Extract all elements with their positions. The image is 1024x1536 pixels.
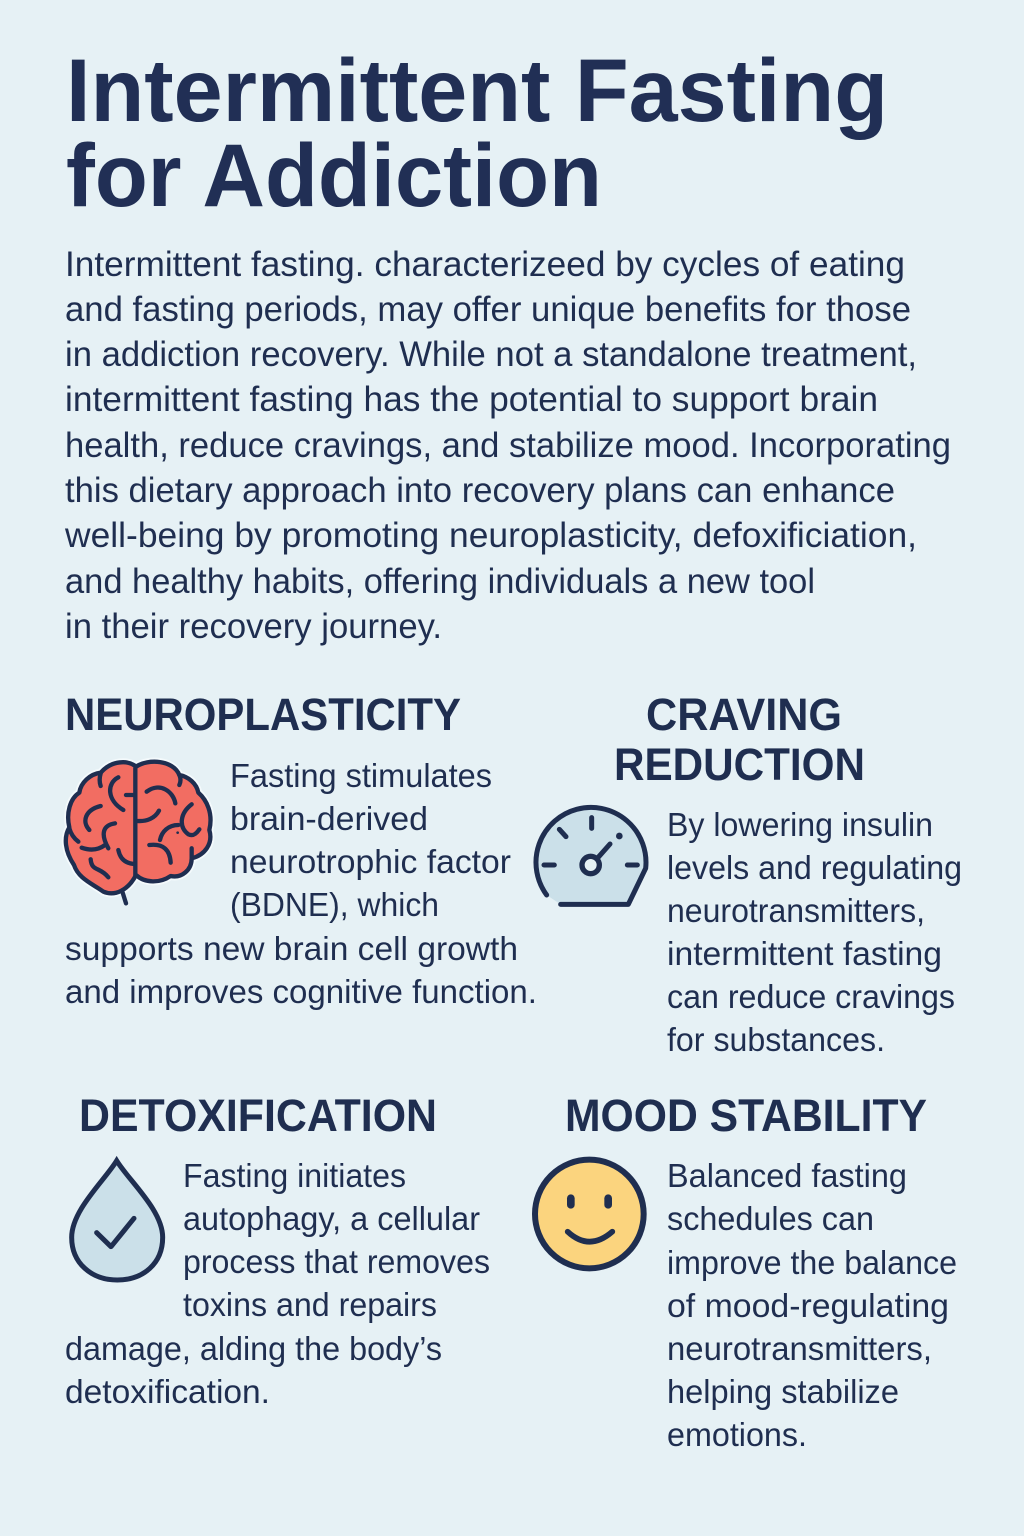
- body text: and improves cognitive function.: [65, 973, 537, 1010]
- heading: detoxification: DETOXIFICATION: [79, 1090, 437, 1141]
- body text: helping stabilize: [667, 1373, 899, 1410]
- body text: can reduce cravings: [667, 978, 955, 1015]
- body text: detoxification.: [65, 1373, 270, 1410]
- intro paragraph: and healthy habits, offering individuals a new tool: [65, 562, 815, 601]
- intro paragraph: this dietary approach into recovery plans can enhance: [65, 471, 895, 510]
- body text: levels and regulating: [667, 849, 962, 886]
- panel: neuroplasticity: [65, 689, 537, 1010]
- body text: toxins and repairs: [183, 1286, 437, 1323]
- heading: mood stability: MOOD STABILITY: [565, 1090, 927, 1141]
- heading: neuroplasticity: NEUROPLASTICITY: [65, 689, 461, 740]
- body text: for substances.: [667, 1021, 885, 1058]
- body text: neurotransmitters,: [667, 892, 925, 929]
- panel: craving reduction: [536, 689, 962, 1058]
- body text: [65, 757, 537, 1010]
- title: for Addiction: [66, 125, 602, 225]
- title: [66, 40, 888, 225]
- body text: (BDNE), which: [230, 886, 439, 923]
- intro paragraph: health, reduce cravings, and stabilize mood. Incorporating: [65, 426, 951, 465]
- body text: neurotrophic factor: [230, 843, 511, 880]
- body text: of mood-regulating: [667, 1287, 949, 1324]
- panel: mood stability: [535, 1090, 957, 1453]
- body text: neurotransmitters,: [667, 1330, 932, 1367]
- body text: schedules can: [667, 1200, 874, 1237]
- intro paragraph: and fasting periods, may offer unique benefits for those: [65, 290, 911, 329]
- intro paragraph: [64, 245, 951, 646]
- body text: [65, 1157, 490, 1410]
- body text: process that removes: [183, 1243, 490, 1280]
- body text: By lowering insulin: [667, 806, 933, 843]
- body text: [667, 1157, 957, 1453]
- intro paragraph: in their recovery journey.: [65, 607, 442, 646]
- icon: brain: [66, 762, 211, 903]
- heading: craving reduction: REDUCTION: [614, 739, 865, 790]
- body text: intermittent fasting: [667, 935, 942, 972]
- panel: detoxification: [65, 1090, 490, 1410]
- body text: Balanced fasting: [667, 1157, 907, 1194]
- body text: damage, alding the body’s: [65, 1330, 442, 1367]
- icon: water drop with check: [72, 1161, 163, 1280]
- intro paragraph: Intermittent fasting. characterizeed by cycles of eating: [65, 245, 905, 284]
- intro paragraph: well-being by promoting neuroplasticity, defoxificiation,: [64, 516, 917, 555]
- title: Intermittent Fasting: [66, 40, 888, 140]
- body text: improve the balance: [667, 1244, 957, 1281]
- body text: emotions.: [667, 1416, 807, 1453]
- heading: craving reduction: [614, 689, 865, 790]
- body text: autophagy, a cellular: [183, 1200, 480, 1237]
- body text: Fasting stimulates: [230, 757, 492, 794]
- heading: craving reduction: CRAVING: [646, 689, 842, 740]
- intro paragraph: intermittent fasting has the potential to support brain: [65, 380, 878, 419]
- body text: supports new brain cell growth: [65, 930, 518, 967]
- icon: smiley face: [535, 1160, 644, 1268]
- icon: gauge: [536, 807, 646, 904]
- intro paragraph: in addiction recovery. While not a standalone treatment,: [65, 335, 917, 374]
- body text: [667, 806, 962, 1058]
- body text: Fasting initiates: [183, 1157, 406, 1194]
- body text: brain-derived: [230, 800, 428, 837]
